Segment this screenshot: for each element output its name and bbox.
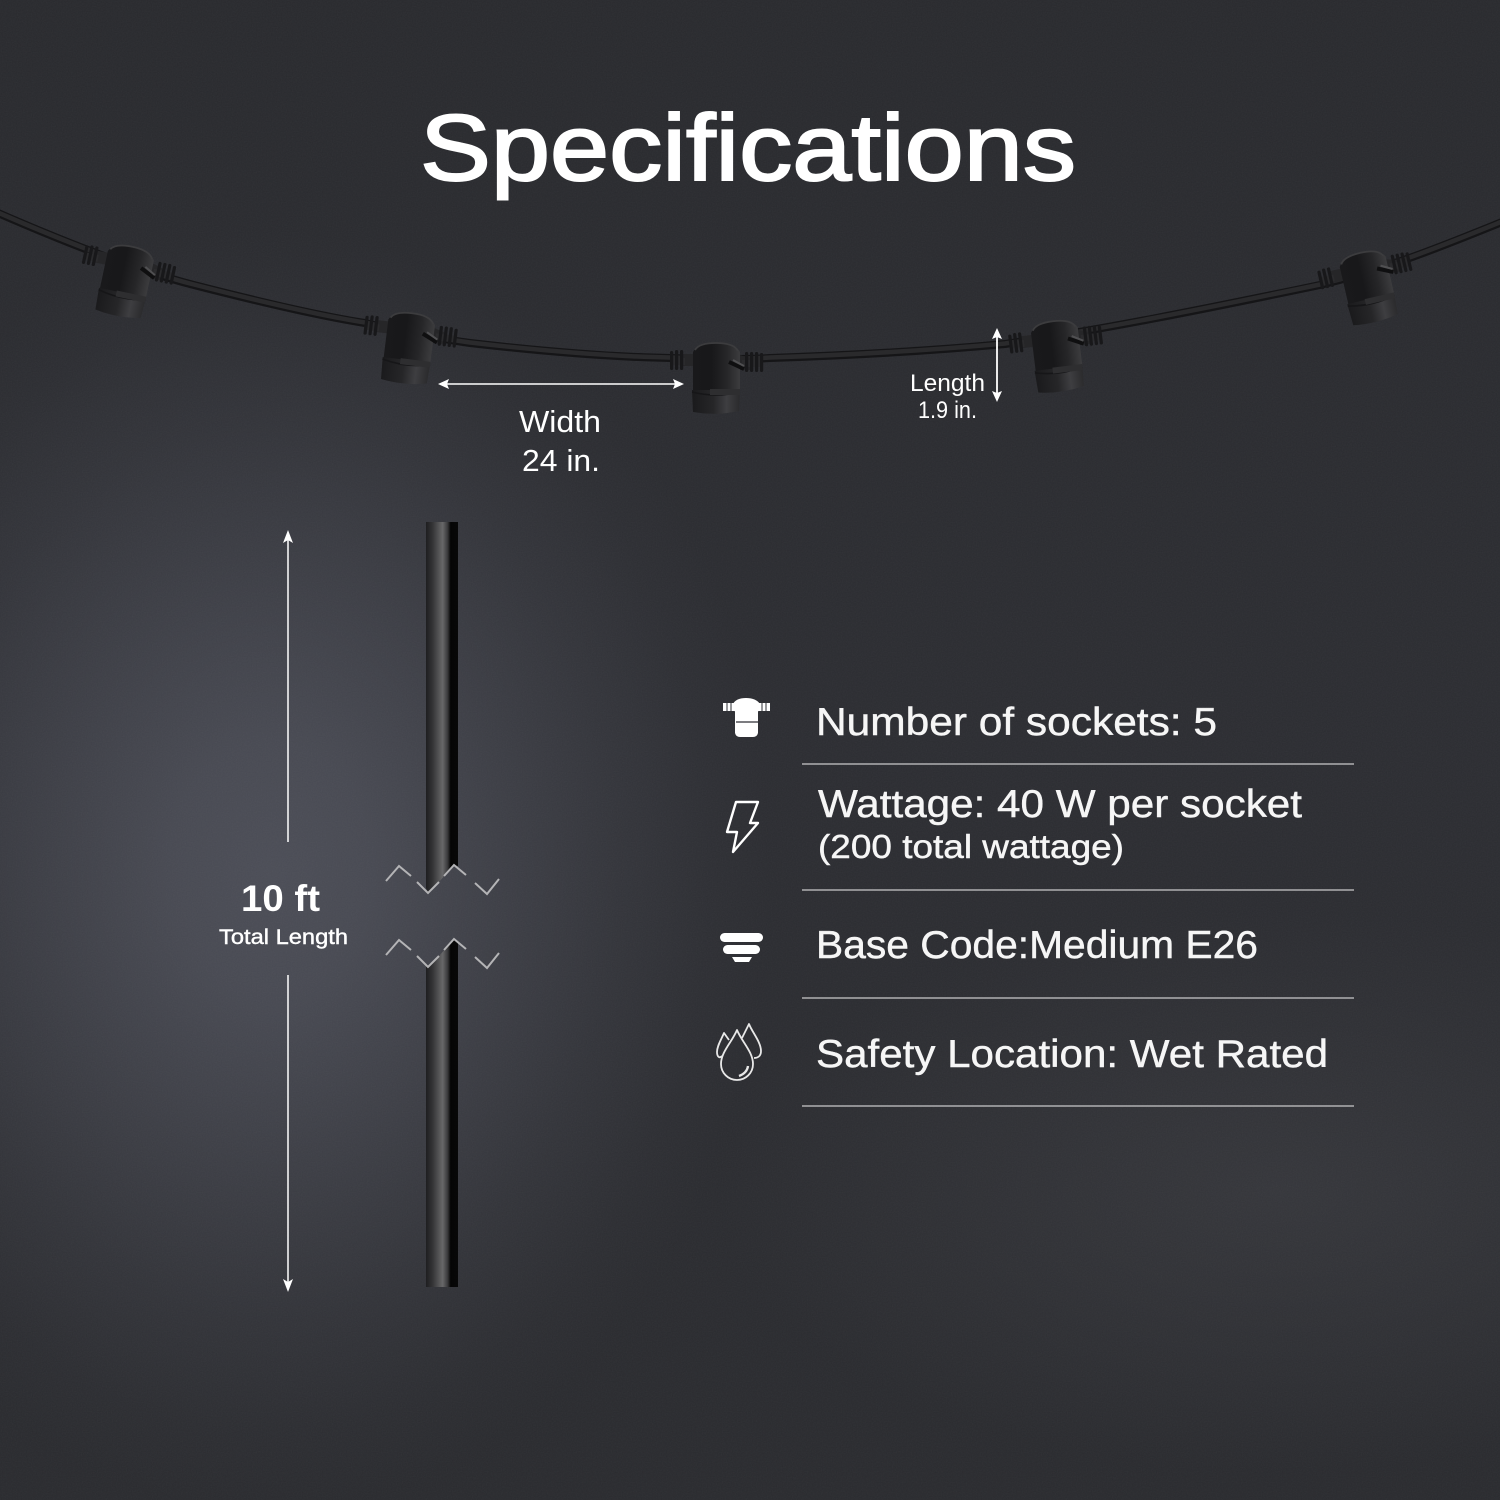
cable cross-section with break (386, 522, 499, 1287)
width dimension (438, 379, 684, 478)
socket 3 (670, 343, 763, 414)
icon: lightning bolt (727, 802, 758, 852)
wattage text: Wattage: 40 W per socket (818, 783, 1302, 826)
lower cable segment (426, 939, 458, 1287)
socket 2 (358, 308, 459, 389)
icon: base (720, 933, 763, 962)
specifications list (717, 698, 1354, 1106)
row: safety (717, 1024, 1328, 1080)
total length dimension (219, 530, 348, 1292)
sockets text: Number of sockets: 5 (816, 701, 1217, 744)
length dimension: 1.9 in. (918, 397, 977, 424)
icon: socket (723, 698, 770, 737)
wattage subtext: (200 total wattage) (818, 828, 1124, 865)
total length value: 10 ft (241, 878, 320, 919)
width arrow (438, 379, 684, 389)
safety text: Safety Location: Wet Rated (816, 1033, 1328, 1076)
icon: water drops (717, 1024, 761, 1080)
row: sockets (723, 698, 1217, 744)
title: Specifications (420, 95, 1076, 200)
length arrow (992, 328, 1002, 402)
wire (0, 212, 1500, 359)
upper cable segment (426, 522, 458, 893)
socket 1 (73, 237, 178, 326)
base code text: Base Code:Medium E26 (816, 924, 1258, 967)
row: base code (720, 924, 1258, 967)
length dimension (910, 328, 1002, 424)
width dimension: 24 in. (522, 443, 600, 478)
row: wattage (727, 783, 1302, 865)
width label: Width (519, 404, 601, 439)
break marks (386, 865, 499, 968)
total length caption: Total Length (219, 926, 348, 949)
socket 5 (1315, 242, 1422, 332)
string light cable with sockets (0, 212, 1500, 414)
socket 4 (1007, 316, 1108, 397)
vertical arrow (283, 530, 293, 1292)
length label: Length (910, 370, 985, 397)
